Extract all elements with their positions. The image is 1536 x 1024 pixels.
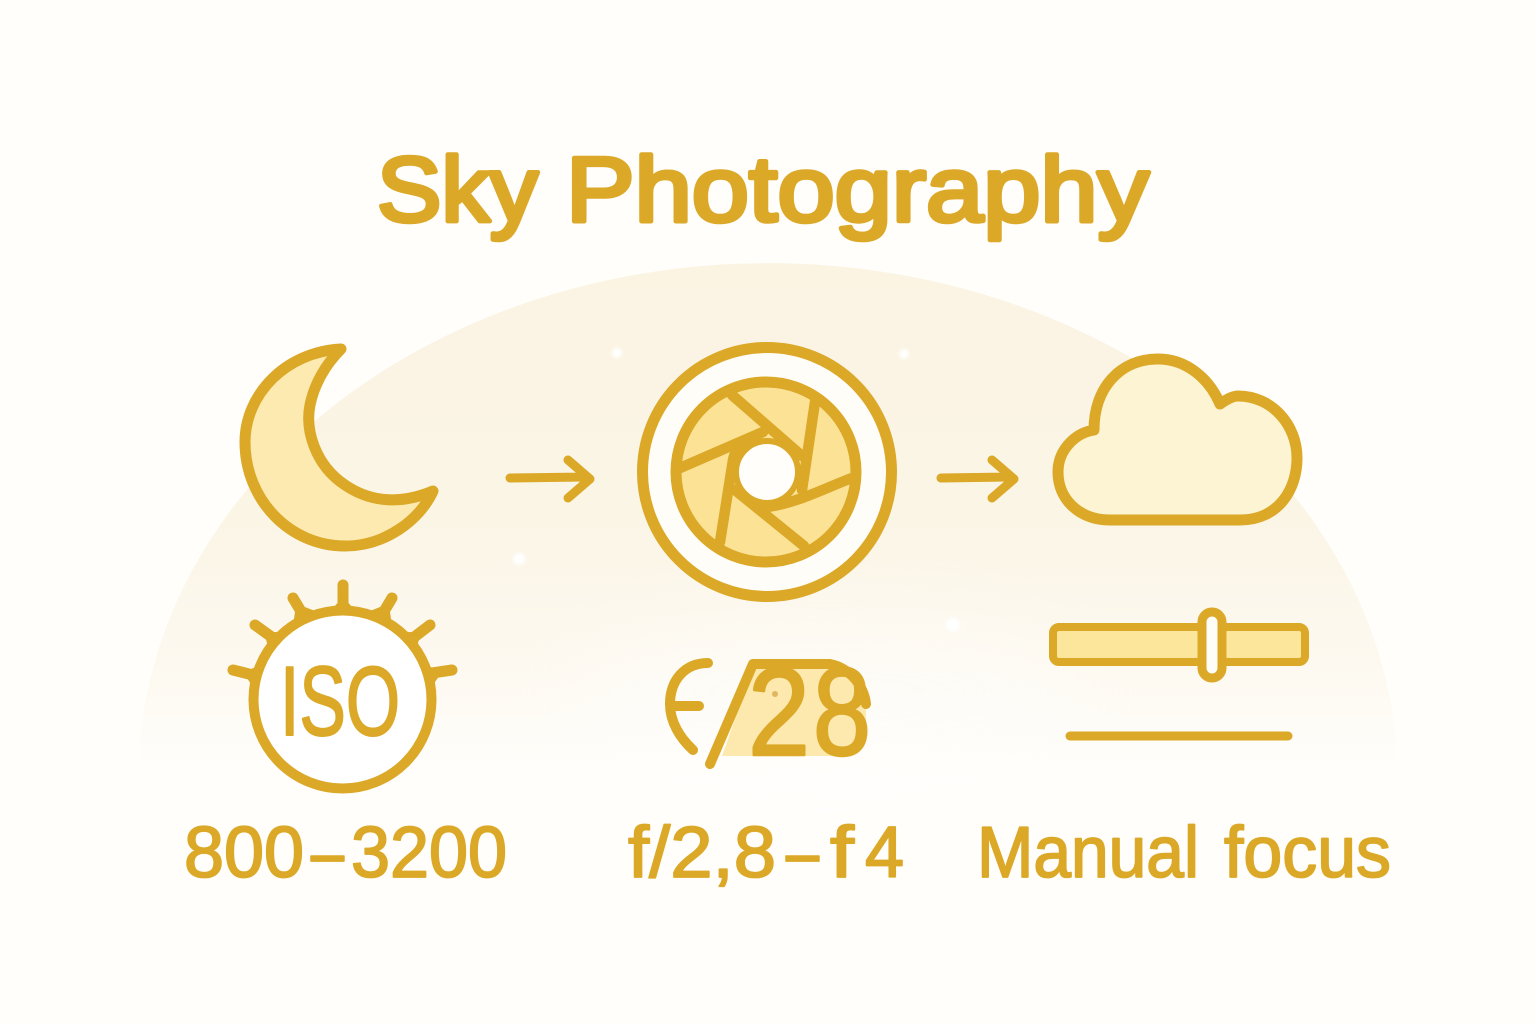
label: aperture range: 4	[865, 813, 904, 893]
label: aperture range: –	[786, 813, 820, 893]
icon: f/2.8 aperture badge	[670, 643, 871, 782]
label: ISO range: –	[311, 813, 345, 893]
label: ISO range	[184, 813, 507, 893]
icon: cloud	[1058, 359, 1297, 520]
highlight spot	[772, 691, 778, 697]
decorative stars	[513, 348, 960, 632]
icon: manual focus slider	[1053, 612, 1305, 736]
label: focus mode	[977, 813, 1391, 893]
sun rays	[233, 585, 452, 688]
label: focus mode: Manual	[977, 813, 1199, 893]
digits 2 and 8: 2	[748, 643, 810, 782]
title	[377, 139, 1149, 241]
aperture blades	[680, 395, 852, 546]
ISO lettering: ISO	[280, 646, 400, 756]
icon: camera aperture	[642, 348, 892, 596]
label: aperture range	[628, 813, 904, 893]
label: ISO range: 800	[184, 813, 304, 893]
arrow: aperture to cloud	[941, 460, 1014, 498]
background dome	[138, 263, 1398, 780]
title: Photography	[566, 139, 1149, 241]
title: Sky	[377, 139, 538, 241]
label: aperture range: f	[830, 813, 855, 893]
f curve and slash	[670, 663, 866, 764]
icon: ISO sun dial	[233, 585, 452, 788]
icon: crescent moon	[245, 349, 433, 546]
arrow: moon to aperture	[510, 460, 590, 498]
label: focus mode: focus	[1224, 813, 1391, 893]
label: aperture range: f/2,8	[628, 813, 776, 893]
label: ISO range: 3200	[351, 813, 507, 893]
icon: f/2.8 aperture badge: 8	[813, 643, 871, 782]
